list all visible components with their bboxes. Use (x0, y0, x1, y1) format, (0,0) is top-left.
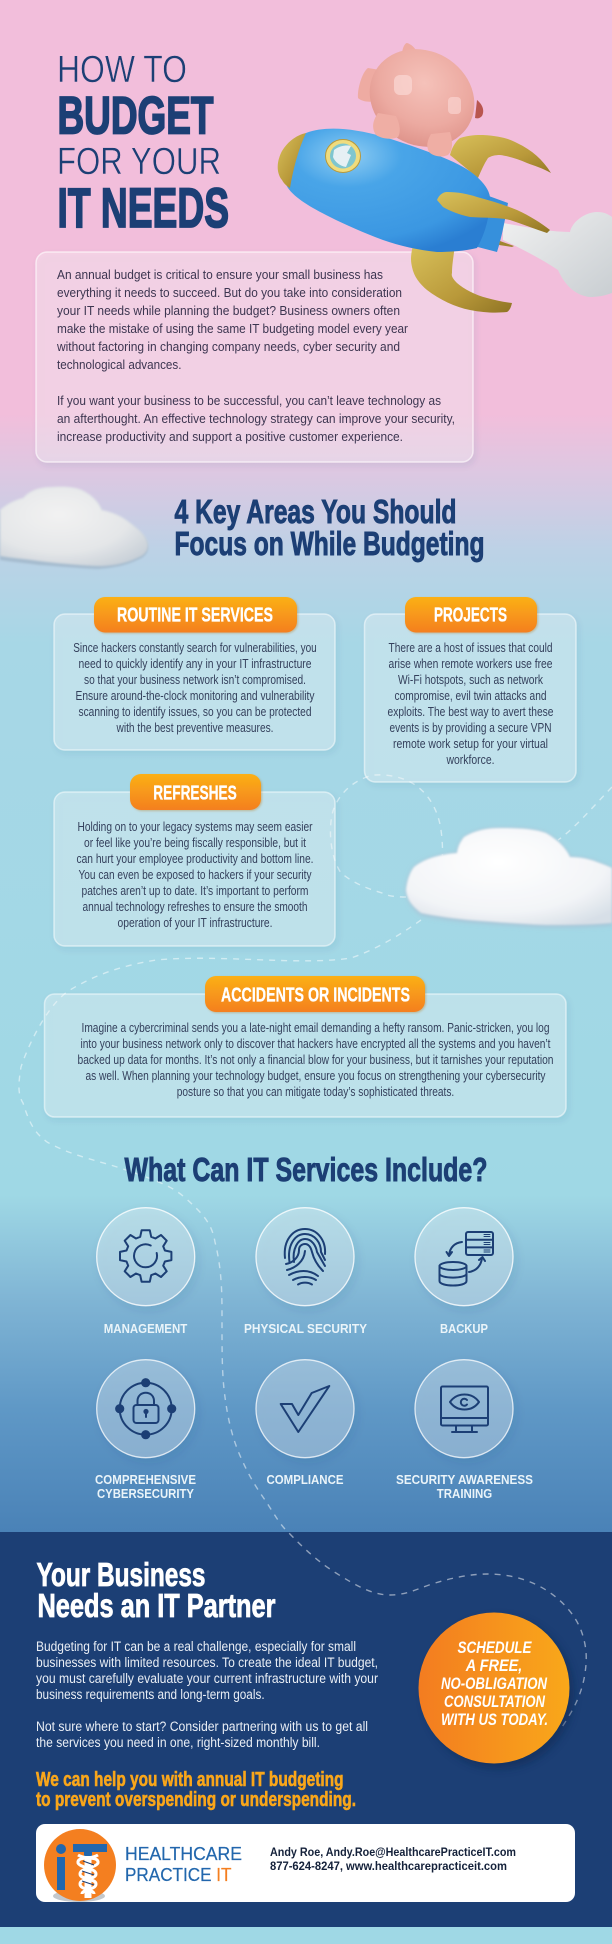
badge: accidents or incidents: ACCIDENTS OR INCIDENTS (221, 984, 410, 1006)
badge: refreshes: REFRESHES (153, 782, 237, 804)
body text: projects: remote work setup for your virtual (393, 737, 548, 751)
label: security awareness training (396, 1473, 533, 1501)
section heading: 4 key areas: Focus on While Budgeting (174, 525, 484, 562)
body text: accidents or incidents: posture so that you can mitigate today’s sophisticated threats. (177, 1085, 454, 1099)
heading: your business needs an IT partner: Needs an IT Partner (38, 1587, 276, 1624)
label: backup: BACKUP (440, 1322, 488, 1336)
label: management: MANAGEMENT (104, 1322, 188, 1336)
icon: padlock in ring (116, 1379, 175, 1438)
call to action: schedule consultation: NO-OBLIGATION (441, 1674, 548, 1693)
body text: routine IT services: Since hackers constantly search for vulnerabilities, you (73, 641, 317, 655)
logo: healthcare practice IT (44, 1829, 242, 1902)
body text: routine IT services: with the best preventive measures. (116, 721, 274, 735)
bottom strip (0, 1927, 612, 1944)
call to action: schedule consultation: A FREE, (465, 1656, 522, 1675)
call to action: schedule consultation: SCHEDULE (458, 1638, 532, 1657)
service: security awareness training (396, 1360, 533, 1501)
contact details: Andy Roe, Andy.Roe@HealthcarePracticeIT.com (270, 1845, 516, 1859)
intro text: an afterthought. An effective technology strategy can improve your security, (57, 411, 455, 426)
contact details (270, 1845, 516, 1873)
callout: annual IT budgeting (36, 1768, 356, 1811)
panel: accidents or incidents (44, 976, 566, 1117)
icon: server and database (440, 1232, 493, 1286)
contact details: 877-624-8247, www.healthcarepracticeit.com (270, 1859, 507, 1873)
body text: projects: exploits. The best way to avert these (388, 705, 554, 719)
heading: your business needs an IT partner (36, 1556, 276, 1624)
text block: partner copy: Not sure where to start? Consider partnering with us to get all (36, 1719, 368, 1734)
callout: annual IT budgeting: We can help you with annual IT budgeting (36, 1768, 344, 1791)
body text: refreshes: can hurt your employee productivity and bottom line. (76, 852, 314, 866)
label: comprehensive cybersecurity: COMPREHENSIVE (95, 1473, 196, 1487)
title: HOW TO (57, 49, 187, 91)
label: compliance: COMPLIANCE (266, 1473, 344, 1487)
badge: refreshes (130, 774, 261, 810)
body text: projects: Wi-Fi hotspots, such as network (398, 673, 544, 687)
body text: projects: workforce. (446, 753, 494, 767)
service: compliance (256, 1360, 354, 1487)
background gradient (0, 0, 612, 1532)
label: security awareness training: SECURITY AWARENESS (396, 1473, 533, 1487)
body text: routine IT services (73, 641, 317, 735)
body text: projects: events is by providing a secure VPN (390, 721, 552, 735)
rocket nozzle (470, 195, 508, 252)
service: comprehensive cybersecurity (95, 1360, 196, 1501)
panel: intro (36, 252, 473, 462)
text block: partner copy: the services you need in one, right-sized monthly bill. (36, 1735, 320, 1750)
text block: partner copy: business requirements and long-term goals. (36, 1687, 265, 1702)
body text: routine IT services: so that your business network isn’t compromised. (84, 673, 306, 687)
call to action: schedule consultation: CONSULTATION (444, 1692, 546, 1711)
section heading: what can IT services include: What Can IT Services Include? (124, 1151, 488, 1188)
icon: fingerprint (285, 1229, 325, 1284)
cloud: top left (0, 487, 148, 569)
title: FOR YOUR (57, 141, 221, 183)
service: backup (415, 1208, 513, 1336)
icon: check mark (281, 1386, 329, 1432)
body text: projects: There are a host of issues that could (388, 641, 552, 655)
intro text: technological advances. (57, 357, 182, 372)
intro text: If you want your business to be successful, you can’t leave technology as (57, 393, 441, 408)
badge: projects (405, 597, 537, 632)
piggy bank (352, 30, 492, 166)
footer band: navy (0, 1532, 612, 1927)
title: BUDGET (58, 86, 214, 146)
rocket exhaust smoke (503, 212, 612, 297)
title (57, 49, 229, 239)
badge: routine IT services (94, 597, 297, 632)
body text: refreshes: annual technology refreshes to ensure the smooth (82, 900, 308, 914)
intro text: without factoring in changing company needs, cyber security and (56, 339, 400, 354)
rocket body (278, 129, 490, 252)
intro text (56, 267, 455, 444)
illustration: rocket with piggy bank (278, 30, 612, 313)
section heading: 4 key areas: 4 Key Areas You Should (174, 493, 456, 530)
intro text: make the mistake of using the same IT budgeting model every year (57, 321, 409, 336)
service: management (97, 1208, 195, 1336)
text block: partner copy (36, 1639, 378, 1750)
call to action: schedule consultation (418, 1612, 574, 1769)
bottom fin (411, 245, 512, 313)
logo wordmark: HEALTHCARE (125, 1844, 242, 1864)
label: comprehensive cybersecurity (95, 1473, 196, 1501)
body text: projects (388, 641, 554, 767)
body text: refreshes: or feel like you’re being fiscally responsible, but it (84, 836, 306, 850)
dashed flight path (19, 775, 612, 1727)
body text: routine IT services: Ensure around-the-clock monitoring and vulnerability (76, 689, 315, 703)
icon: gear (120, 1230, 171, 1282)
text block: partner copy: businesses with limited resources. To create the ideal IT budget, (36, 1655, 378, 1670)
panel: routine IT services (54, 597, 335, 750)
intro text: your IT needs while planning the budget? Business owners often (57, 303, 400, 318)
badge: routine IT services: ROUTINE IT SERVICES (117, 604, 273, 626)
badge: projects: PROJECTS (434, 604, 507, 626)
badge: accidents or incidents (205, 976, 425, 1012)
body text: refreshes (76, 820, 314, 930)
body text: refreshes: You can even be exposed to hackers if your security (78, 868, 312, 882)
top fin (450, 135, 551, 178)
label: security awareness training: TRAINING (437, 1487, 492, 1501)
label: physical security: PHYSICAL SECURITY (244, 1322, 368, 1336)
body text: routine IT services: need to quickly identify any in your IT infrastructure (78, 657, 312, 671)
intro text: increase productivity and support a positive customer experience. (57, 429, 403, 444)
section heading: 4 key areas (174, 493, 484, 562)
service: physical security (244, 1208, 368, 1336)
call to action: schedule consultation: WITH US TODAY. (441, 1710, 548, 1729)
text block: partner copy: Budgeting for IT can be a real challenge, especially for small (36, 1639, 356, 1654)
panel: refreshes (54, 774, 335, 946)
body text: refreshes: Holding on to your legacy systems may seem easier (78, 820, 312, 834)
label: comprehensive cybersecurity: CYBERSECURITY (97, 1487, 195, 1501)
callout: annual IT budgeting: to prevent overspending or underspending. (36, 1788, 356, 1811)
logo wordmark: practice IT: PRACTICE IT (125, 1865, 232, 1885)
body text: refreshes: patches aren’t up to date. It’s important to perform (82, 884, 308, 898)
heading: your business needs an IT partner: Your Business (36, 1556, 206, 1593)
body text: projects: arise when remote workers use free (388, 657, 552, 671)
icon: monitor with eye (441, 1386, 488, 1432)
panel: contact bar (36, 1824, 575, 1902)
body text: routine IT services: scanning to identify issues, so you can be protected (78, 705, 312, 719)
body text: accidents or incidents (78, 1021, 554, 1099)
body text: refreshes: operation of your IT infrastructure. (118, 916, 272, 930)
title: IT NEEDS (58, 176, 229, 239)
cloud: right (406, 828, 612, 927)
intro text: An annual budget is critical to ensure your small business has (57, 267, 383, 282)
panel: projects (364, 597, 576, 782)
middle fin (437, 192, 550, 233)
text block: partner copy: you must carefully evaluate your current infrastructure with your (36, 1671, 378, 1686)
intro text: everything it needs to succeed. But do you take into consideration (57, 285, 402, 300)
body text: projects: compromise, evil twin attacks and (394, 689, 546, 703)
rocket window (326, 140, 360, 172)
